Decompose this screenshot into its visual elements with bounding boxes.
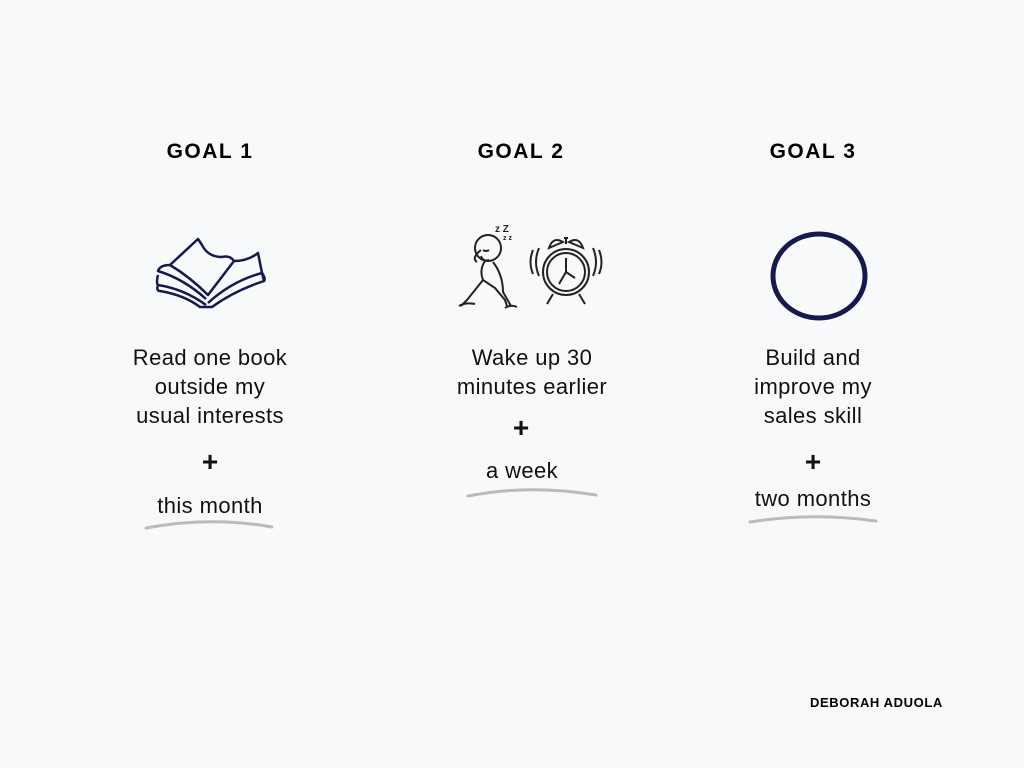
heading: goal 3: GOAL 3 [770, 140, 856, 163]
plus 3: + [805, 446, 821, 477]
icon: open book [156, 238, 266, 308]
timeframe 3: two months [755, 486, 871, 511]
text: goal 1 [133, 345, 287, 428]
text: goal 1: Read one book [133, 345, 287, 370]
text: goal 2: Wake up 30 [472, 345, 592, 370]
text: goal 2 [457, 345, 607, 399]
text: goal 2: minutes earlier [457, 374, 607, 399]
timeframe 2: a week [486, 458, 558, 483]
signature: DEBORAH ADUOLA [810, 695, 943, 710]
heading: goal 1: GOAL 1 [167, 140, 253, 163]
plus 1: + [202, 446, 218, 477]
icon: circle [770, 232, 868, 320]
timeframe 1: this month [157, 493, 263, 518]
text: goal 3 [754, 345, 872, 428]
icon: sleepy man and alarm clock: z Z [495, 224, 509, 235]
plus 2: + [513, 412, 529, 443]
text: goal 3: improve my [754, 374, 872, 399]
icon: sleepy man and alarm clock: z z [503, 235, 512, 242]
icon: sleepy man and alarm clock [458, 224, 602, 309]
text: goal 1: usual interests [136, 403, 284, 428]
text: goal 3: sales skill [764, 403, 862, 428]
heading: goal 2: GOAL 2 [478, 140, 564, 163]
text: goal 1: outside my [155, 374, 265, 399]
text: goal 3: Build and [765, 345, 861, 370]
